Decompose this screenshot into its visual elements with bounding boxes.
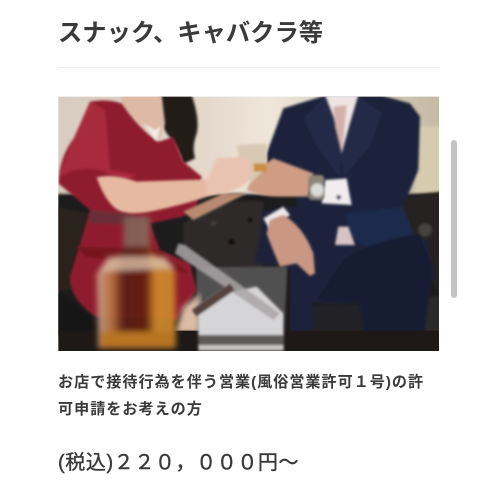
photo: couple with whisky at a lounge sofa	[58, 96, 439, 351]
description text: 可申請をお考えの方	[58, 401, 203, 418]
woman: red dress	[58, 100, 202, 320]
ice bucket with tongs	[175, 243, 287, 351]
whisky bottle	[97, 217, 176, 348]
leather sofa	[55, 192, 442, 333]
man: suit	[255, 95, 433, 333]
watch	[308, 175, 324, 200]
woman: skin neck and chest	[122, 95, 165, 138]
background wall	[55, 93, 442, 337]
necklace	[143, 123, 161, 142]
title: スナック、キャバクラ等	[58, 20, 323, 47]
price: (税込)２２０，０００円〜	[58, 452, 299, 474]
woman: arm	[97, 176, 217, 213]
description text: お店で接待行為を伴う営業(風俗営業許可１号)の許	[58, 374, 424, 391]
woman: hair	[160, 95, 198, 164]
woman: hand on glass	[207, 157, 253, 195]
description text	[58, 374, 424, 418]
woman knee	[175, 293, 200, 333]
man: shirt and tie	[263, 95, 358, 245]
table	[58, 330, 439, 351]
scrollbar	[451, 140, 457, 298]
glass in hands	[237, 143, 267, 183]
man: hand and wrist holding glass	[247, 158, 313, 197]
